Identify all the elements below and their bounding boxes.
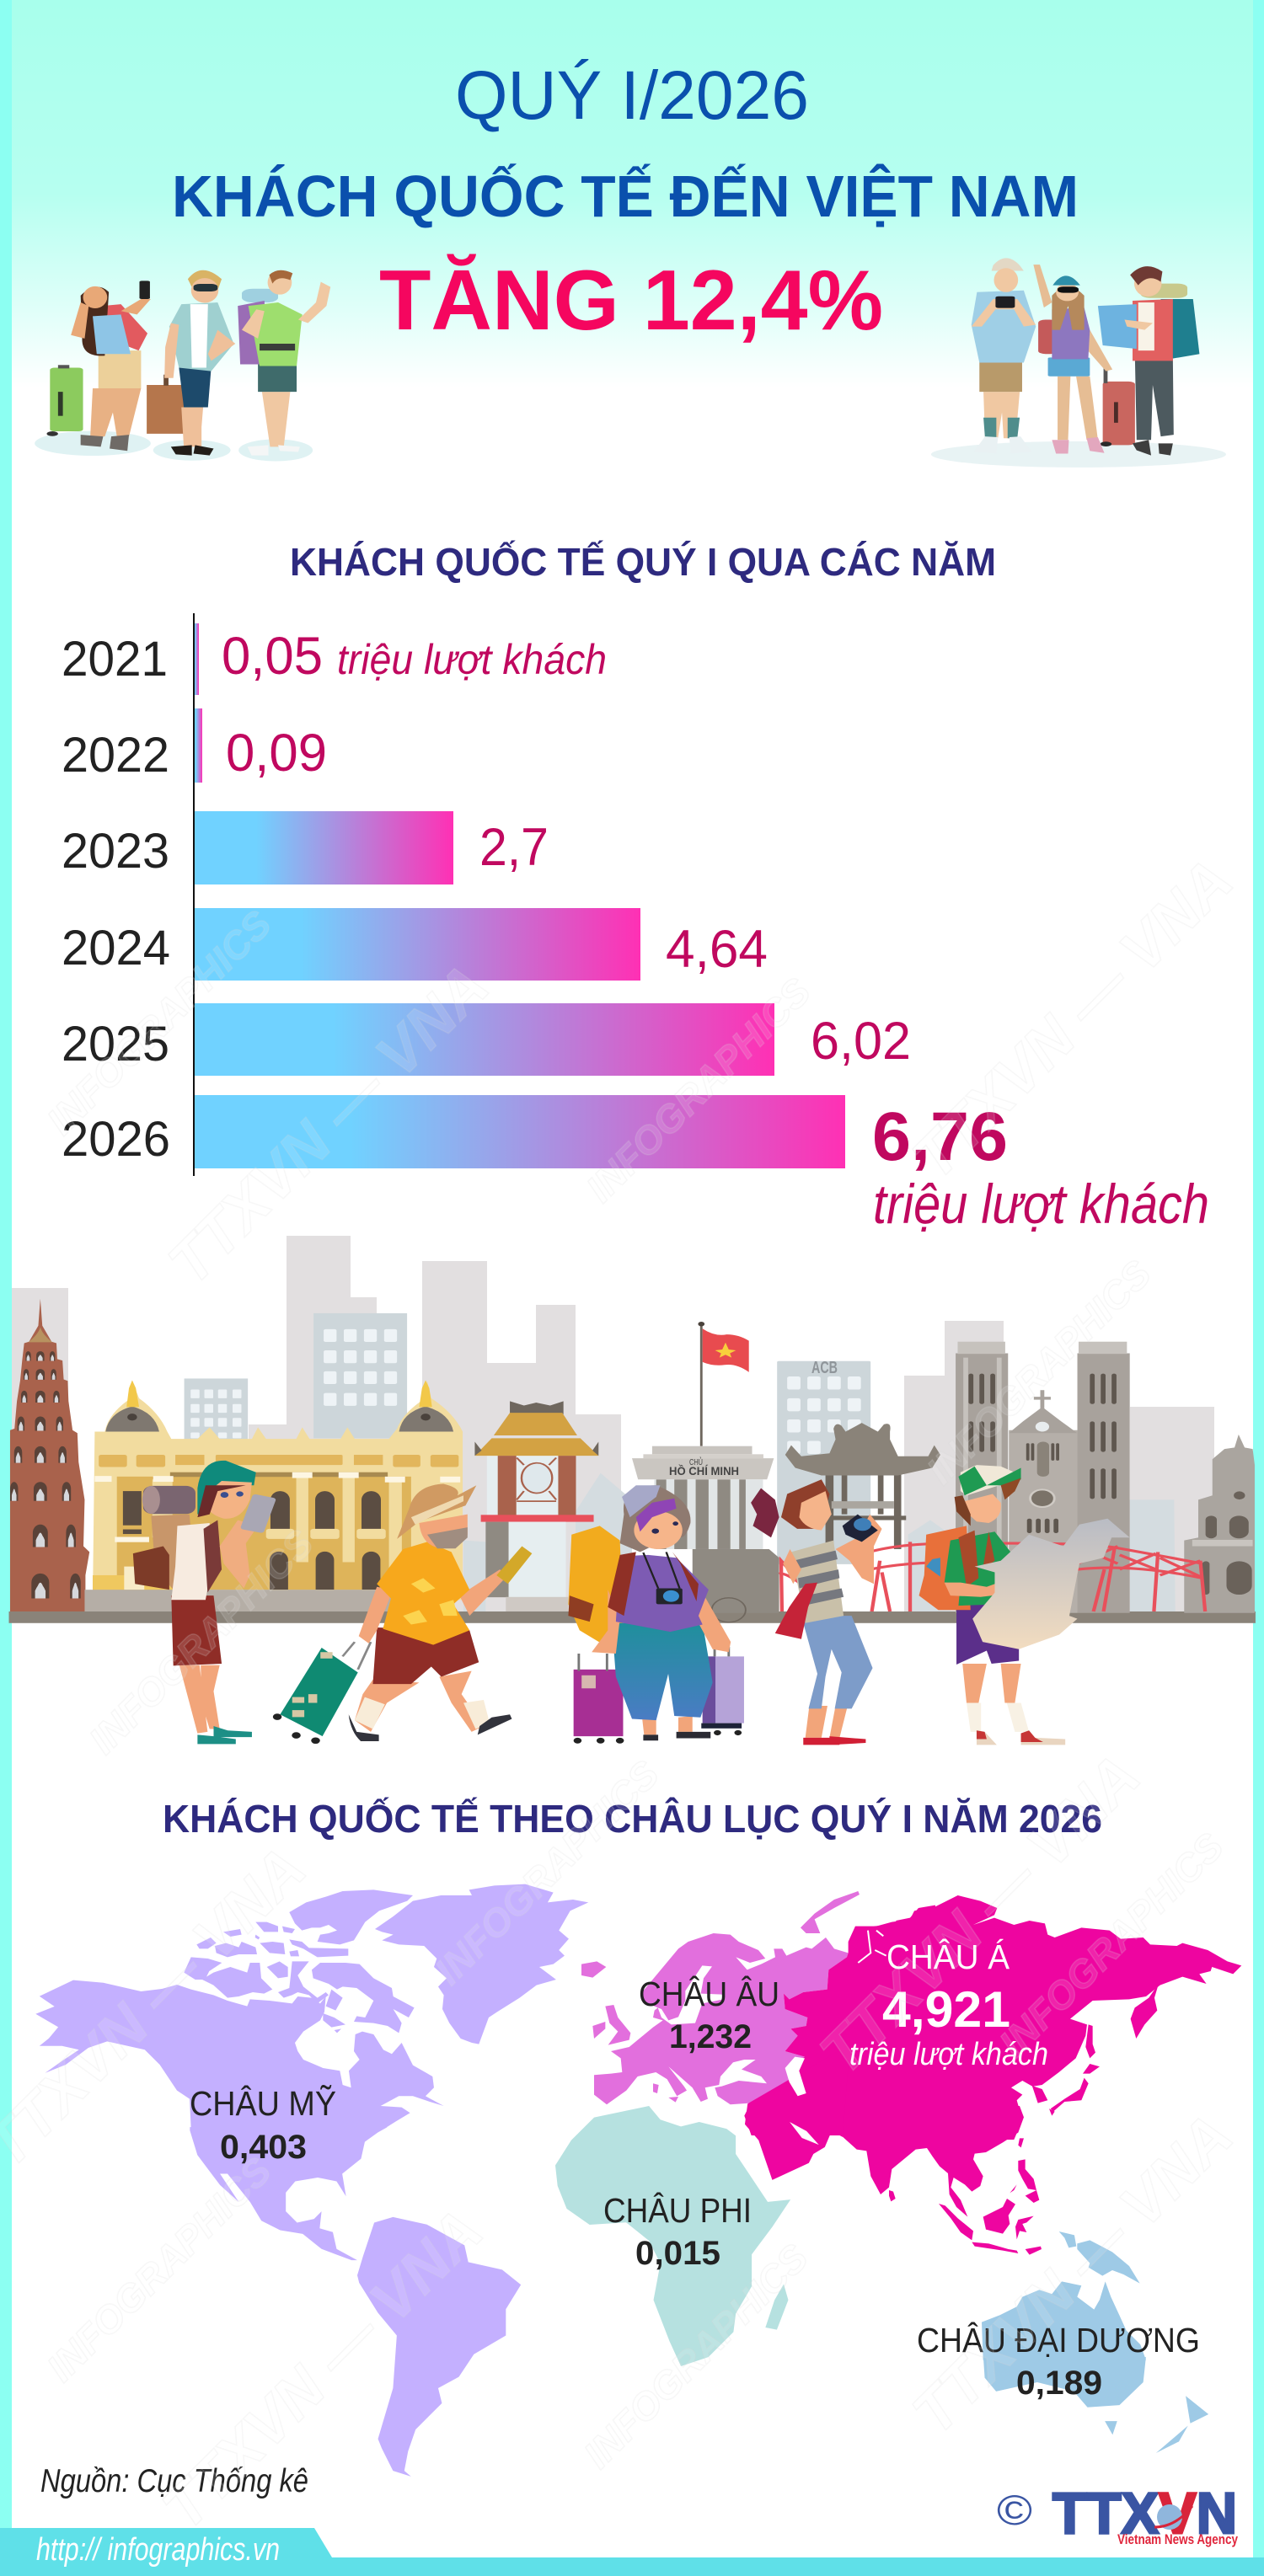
label: Asia: 4,921 — [882, 1981, 1010, 2038]
bar 2023: 2,7 — [479, 818, 549, 877]
tourist: woman with camera — [751, 1479, 882, 1745]
watermarks: INFOGRAPHICS — [81, 1520, 322, 1762]
right part of skyline — [626, 1322, 1256, 1623]
label: Oceania: 0,189 — [1016, 2365, 1102, 2402]
clock tower right — [1184, 1435, 1255, 1613]
pagoda — [10, 1299, 89, 1611]
sign: ACB: ACB — [811, 1359, 838, 1377]
tourist: backpacker with phone — [133, 1461, 276, 1744]
watermarks — [0, 847, 1245, 2542]
label: Asia — [849, 1937, 1048, 2072]
illustration: city skyline — [9, 1236, 1256, 1623]
title: growth figure: TĂNG 12,4% — [379, 254, 883, 348]
bar chart: visitors by year — [62, 613, 1209, 1235]
watermarks: INFOGRAPHICS — [991, 1824, 1232, 2066]
heading: yearly chart: KHÁCH QUỐC TẾ QUÝ I QUA CÁC NĂM — [290, 540, 996, 584]
label: Africa: CHÂU PHI — [603, 2191, 752, 2230]
watermarks: TTXVN — VNA — [156, 952, 501, 1297]
bar 2026: 2026 — [62, 1112, 170, 1167]
watermarks: TTXVN — VNA — [900, 847, 1245, 1192]
illustration: five tourists — [133, 1461, 1130, 1745]
illustration: left tourists group — [35, 270, 330, 462]
label: Americas: CHÂU MỸ — [190, 2084, 336, 2123]
watermarks: INFOGRAPHICS — [39, 2148, 280, 2390]
left part of skyline — [9, 1299, 632, 1623]
background gradient — [0, 0, 1264, 387]
left border strip — [0, 0, 12, 2536]
red gate — [474, 1401, 598, 1611]
label: Africa: 0,015 — [635, 2235, 720, 2272]
label: Asia: triệu lượt khách — [849, 2037, 1048, 2072]
map: Europe — [581, 1891, 860, 2104]
illustration: right tourists group — [931, 258, 1226, 468]
bar 2024: 2024 — [62, 921, 170, 975]
bar 2021 — [62, 623, 607, 695]
bar 2021: 2021 — [62, 632, 168, 687]
tourist: bearded man with suitcase — [273, 1483, 532, 1744]
watermarks: INFOGRAPHICS — [576, 2235, 817, 2477]
bar 2023: 2023 — [62, 824, 169, 879]
mausoleum — [632, 1446, 779, 1613]
bar 2021: triệu lượt khách — [337, 636, 607, 683]
label: Asia: CHÂU Á — [886, 1937, 1010, 1976]
label: Americas — [190, 2084, 336, 2166]
tourist: older woman with luggage — [568, 1485, 744, 1744]
label: Oceania: CHÂU ĐẠI DƯƠNG — [917, 2321, 1200, 2360]
bar 2025: 2025 — [62, 1017, 169, 1072]
watermarks: INFOGRAPHICS — [39, 901, 280, 1143]
ground band — [9, 1611, 632, 1623]
bar 2022: 2022 — [62, 728, 169, 783]
label: Europe: 1,232 — [669, 2018, 752, 2055]
tourist: boy with map — [919, 1465, 1130, 1745]
world map — [35, 1884, 1241, 2477]
bar 2022: 0,09 — [226, 724, 327, 783]
bar 2025: 6,02 — [811, 1012, 911, 1071]
bar 2022 — [62, 708, 327, 783]
sign: mausoleum line 1: CHỦ — [689, 1456, 703, 1467]
cathedral — [956, 1342, 1130, 1613]
bar 2026: 6,76 — [872, 1098, 1008, 1175]
title: period: QUÝ I/2026 — [455, 57, 809, 134]
bar 2023 — [62, 811, 549, 884]
right border strip — [1253, 0, 1264, 2576]
watermarks: INFOGRAPHICS — [426, 1751, 667, 1993]
label: Oceania — [917, 2321, 1200, 2402]
watermarks: TTXVN — VNA — [150, 2197, 495, 2542]
bar 2025 — [62, 1003, 911, 1076]
label: Americas: 0,403 — [220, 2129, 307, 2166]
pavilion — [785, 1423, 940, 1549]
watermarks: TTXVN — VNA — [807, 1742, 1153, 2087]
bar 2026: triệu lượt khách — [873, 1173, 1209, 1235]
bar 2026 — [62, 1095, 1209, 1235]
background towers — [12, 1236, 1214, 1611]
title: main heading: KHÁCH QUỐC TẾ ĐẾN VIỆT NAM — [172, 163, 1079, 229]
opera house — [84, 1381, 463, 1611]
bar 2024 — [62, 908, 768, 981]
sign: mausoleum line 2: HỒ CHÍ MINH — [669, 1463, 739, 1478]
heading: continents map: KHÁCH QUỐC TẾ THEO CHÂU LỤC QUÝ I NĂM 2026 — [163, 1797, 1102, 1841]
label: Europe — [639, 1975, 779, 2055]
label: Africa — [603, 2191, 752, 2272]
label: Europe: CHÂU ÂU — [639, 1975, 779, 2013]
map: Asia — [744, 1895, 1241, 2255]
footer band — [0, 2528, 1264, 2576]
bar 2021: 0,05 — [222, 627, 323, 686]
map: Oceania — [982, 2231, 1208, 2453]
map: Americas — [35, 1884, 588, 2477]
footer url: http:// infographics.vn — [36, 2532, 280, 2568]
logo: TTXVN: © — [997, 2487, 1032, 2534]
watermarks: INFOGRAPHICS — [919, 1251, 1160, 1493]
watermarks: INFOGRAPHICS — [578, 969, 819, 1211]
red bridge — [779, 1542, 1205, 1611]
bar 2024: 4,64 — [666, 920, 768, 979]
source note: Nguồn: Cục Thống kê — [40, 2463, 308, 2499]
flag — [698, 1322, 749, 1446]
map: Africa — [555, 2106, 790, 2366]
chart axis — [193, 613, 195, 1176]
watermarks: TTXVN — VNA — [900, 2102, 1245, 2447]
logo: TTXVN: TTXVN — [1052, 2481, 1237, 2546]
